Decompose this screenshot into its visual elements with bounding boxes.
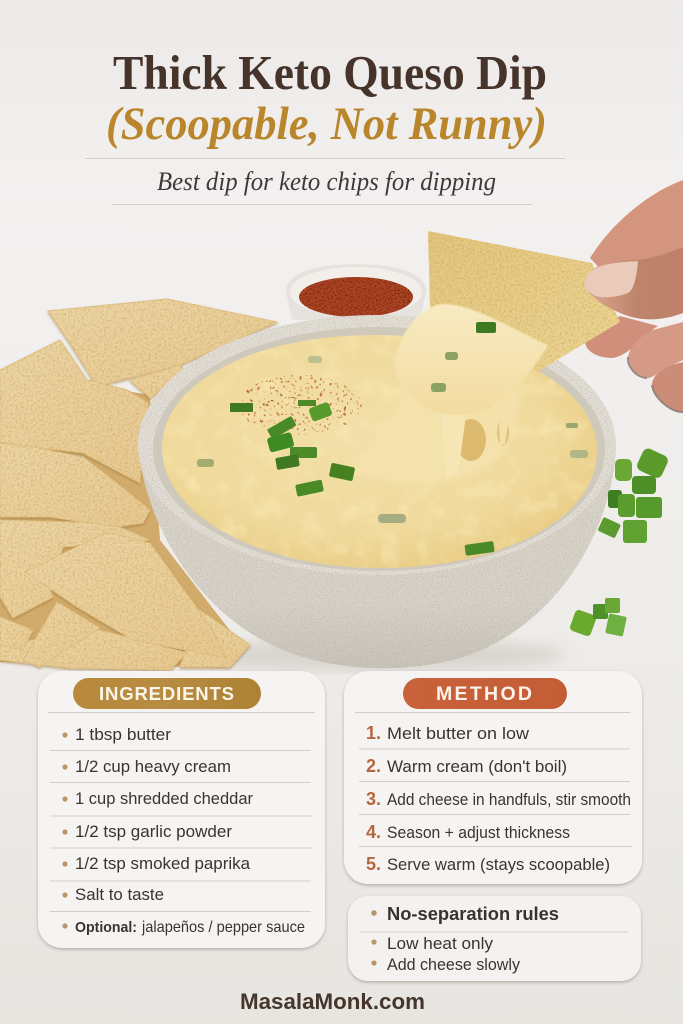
food photo: [0, 180, 683, 671]
method heading pill: METHOD: [436, 683, 532, 705]
rules heading: No-separation rules: [387, 904, 559, 924]
method steps: 5.: [366, 854, 381, 874]
chopped jalapenos right: [597, 447, 670, 543]
ingredients list: 1 tbsp butter: [75, 725, 171, 744]
queso surface: [162, 335, 597, 568]
method steps: 2.: [366, 756, 381, 776]
ingredients list: 1/2 tsp smoked paprika: [75, 854, 251, 873]
method steps: Warm cream (don't boil): [387, 757, 567, 776]
hand: fingers behind chip: [585, 180, 683, 412]
hand: thumb: [584, 247, 683, 319]
ingredients heading pill: INGREDIENTS: [99, 683, 234, 704]
method steps: Add cheese in handfuls, stir smooth: [387, 790, 631, 809]
dipping chip: [428, 231, 620, 372]
panel: method: [344, 671, 642, 884]
method steps: 4.: [366, 822, 381, 842]
method steps: 1.: [366, 723, 381, 743]
method steps: Season + adjust thickness: [387, 823, 570, 842]
method heading pill: [403, 678, 567, 709]
ingredients list: 1/2 cup heavy cream: [75, 757, 231, 776]
footer website: MasalaMonk.com: [240, 989, 425, 1014]
rules list: Add cheese slowly: [387, 955, 520, 974]
table shadow: [185, 639, 565, 671]
ingredients list: jalapeños / pepper sauce: [141, 919, 305, 936]
rules list: Low heat only: [387, 934, 494, 953]
panel: ingredients: [38, 671, 325, 948]
chopped jalapenos bottom: [569, 598, 627, 637]
ingredients list: Optional:: [75, 919, 137, 936]
rules list: [371, 934, 520, 974]
cheese pull: [345, 385, 520, 483]
title: Thick Keto Queso Dip: [113, 45, 547, 100]
scooped queso: [395, 304, 548, 415]
method steps: Melt butter on low: [387, 724, 530, 743]
main bowl: [138, 315, 616, 668]
ingredients heading pill: [73, 678, 261, 709]
jalapeno pieces: [197, 322, 588, 556]
ingredients list: [62, 725, 305, 936]
small spice bowl: [286, 264, 426, 320]
method steps: Serve warm (stays scoopable): [387, 855, 610, 874]
panel: no-separation rules: [348, 896, 641, 981]
chip pile: [0, 299, 277, 670]
method steps: [366, 723, 631, 874]
title: (Scoopable, Not Runny): [106, 98, 547, 150]
subtitle: Best dip for keto chips for dipping: [157, 167, 496, 196]
ingredients list: 1 cup shredded cheddar: [75, 789, 253, 808]
ingredients list: 1/2 tsp garlic powder: [75, 822, 232, 841]
title: [106, 45, 547, 150]
ingredients list: Salt to taste: [75, 885, 164, 904]
method steps: 3.: [366, 789, 381, 809]
paprika dusting: [238, 375, 362, 435]
